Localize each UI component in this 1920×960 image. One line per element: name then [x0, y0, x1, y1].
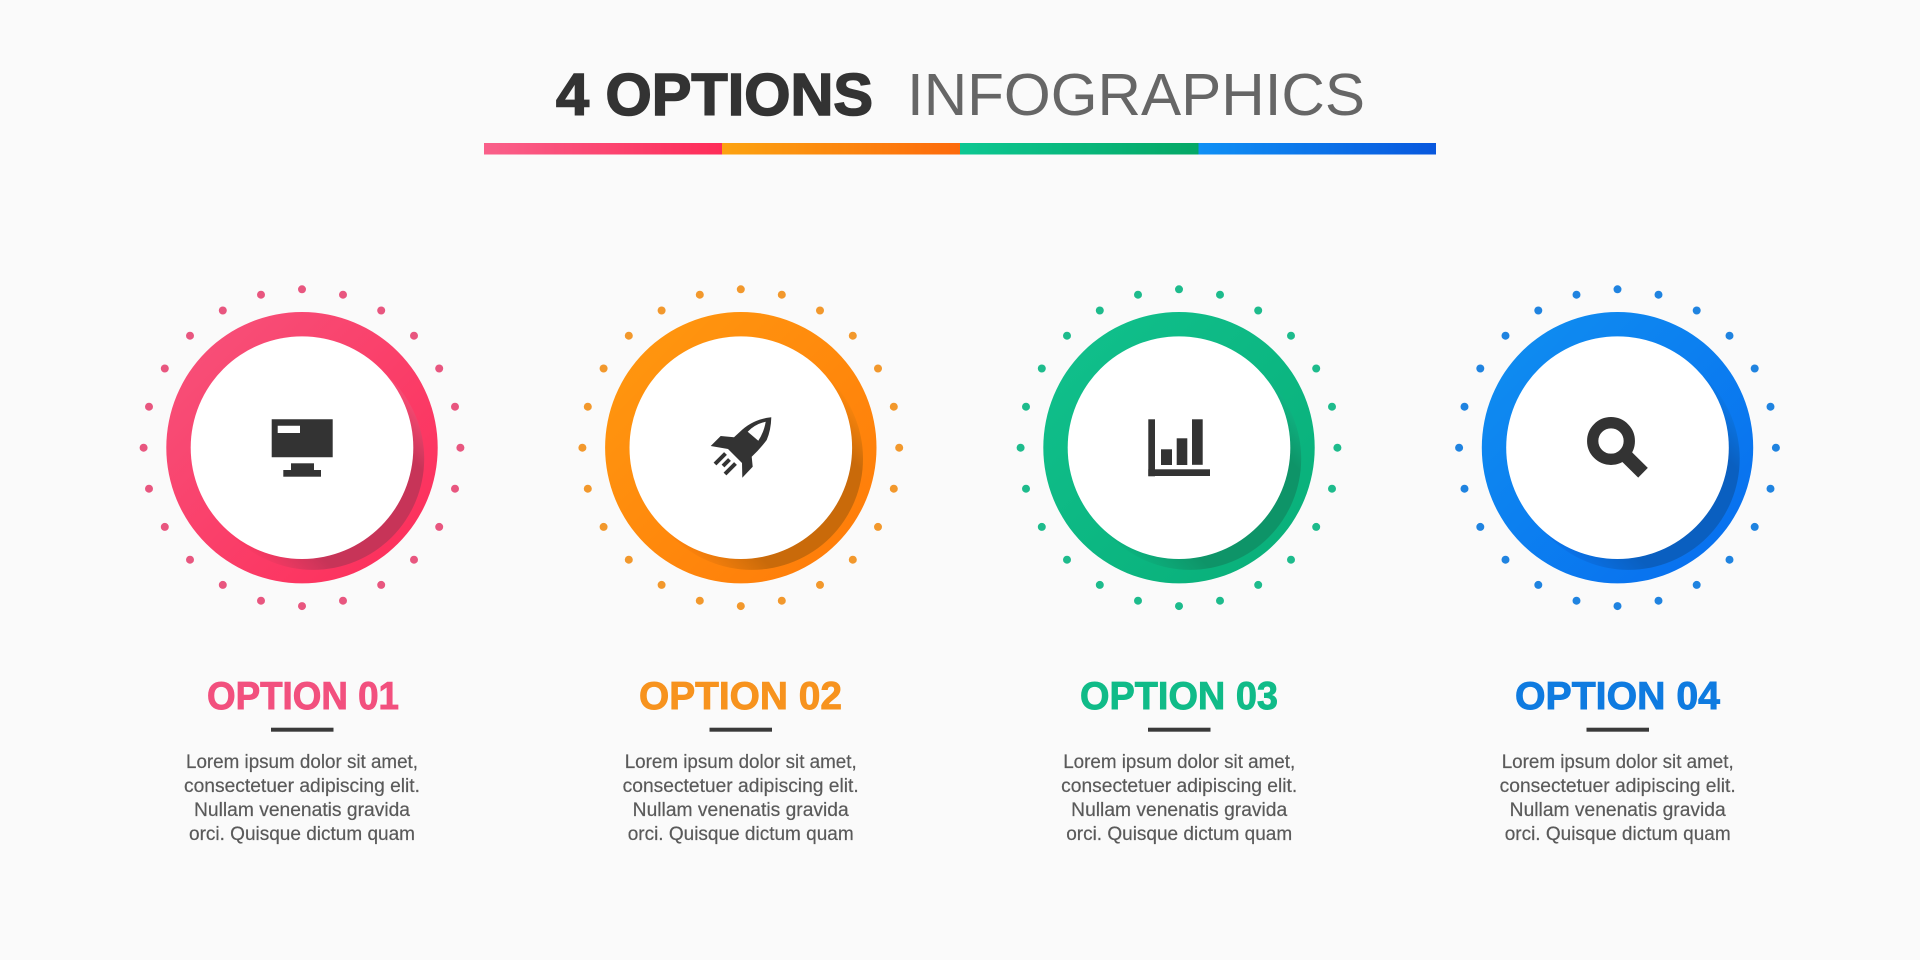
ring 04	[1482, 312, 1753, 583]
text block 03: orci. Quisque dictum quam	[1066, 824, 1292, 845]
text block 01: consectetuer adipiscing elit.	[184, 776, 420, 797]
title: 4 OPTIONS	[556, 62, 873, 128]
divider 03	[1148, 728, 1210, 732]
text block 02: consectetuer adipiscing elit.	[623, 776, 859, 797]
text block 04: Nullam venenatis gravida	[1510, 800, 1726, 821]
panel: option 02	[578, 285, 903, 845]
panel: option 01	[140, 285, 464, 845]
text block 04	[1500, 752, 1736, 845]
heading: option 02: OPTION 02	[639, 675, 842, 718]
text block 03: Lorem ipsum dolor sit amet,	[1063, 752, 1295, 773]
title	[556, 62, 1365, 128]
dotted ring 01	[140, 285, 464, 610]
icon: bar chart	[1148, 419, 1210, 476]
text block 02: Nullam venenatis gravida	[633, 800, 849, 821]
text block 02: orci. Quisque dictum quam	[628, 824, 854, 845]
icon: rocket	[711, 417, 771, 478]
divider 04	[1586, 728, 1649, 732]
divider 02	[710, 728, 772, 732]
panel: option 04	[1455, 285, 1780, 845]
text block 01: orci. Quisque dictum quam	[189, 824, 415, 845]
text block 03: consectetuer adipiscing elit.	[1061, 776, 1297, 797]
dotted ring 03	[1017, 285, 1341, 610]
divider 01	[271, 728, 334, 732]
heading: option 03: OPTION 03	[1080, 675, 1278, 718]
text block 02: Lorem ipsum dolor sit amet,	[625, 752, 857, 773]
text block 04: Lorem ipsum dolor sit amet,	[1502, 752, 1734, 773]
ring 02	[605, 312, 876, 583]
text block 01: Lorem ipsum dolor sit amet,	[186, 752, 418, 773]
heading: option 04: OPTION 04	[1515, 675, 1720, 718]
title colour bar	[484, 143, 1436, 154]
text block 03	[1061, 752, 1297, 845]
icon: monitor	[272, 419, 333, 477]
ring 03	[1043, 312, 1315, 583]
ring 01	[166, 312, 438, 583]
panel: option 03	[1017, 285, 1341, 845]
text block 01	[184, 752, 420, 845]
title: INFOGRAPHICS	[907, 62, 1365, 128]
text block 02	[623, 752, 859, 845]
text block 04: consectetuer adipiscing elit.	[1500, 776, 1736, 797]
icon: magnifier	[1593, 423, 1643, 473]
text block 04: orci. Quisque dictum quam	[1505, 824, 1731, 845]
heading: option 01: OPTION 01	[207, 675, 399, 718]
text block 01: Nullam venenatis gravida	[194, 800, 410, 821]
dotted ring 04	[1455, 285, 1780, 610]
text block 03: Nullam venenatis gravida	[1071, 800, 1288, 821]
dotted ring 02	[578, 285, 903, 610]
